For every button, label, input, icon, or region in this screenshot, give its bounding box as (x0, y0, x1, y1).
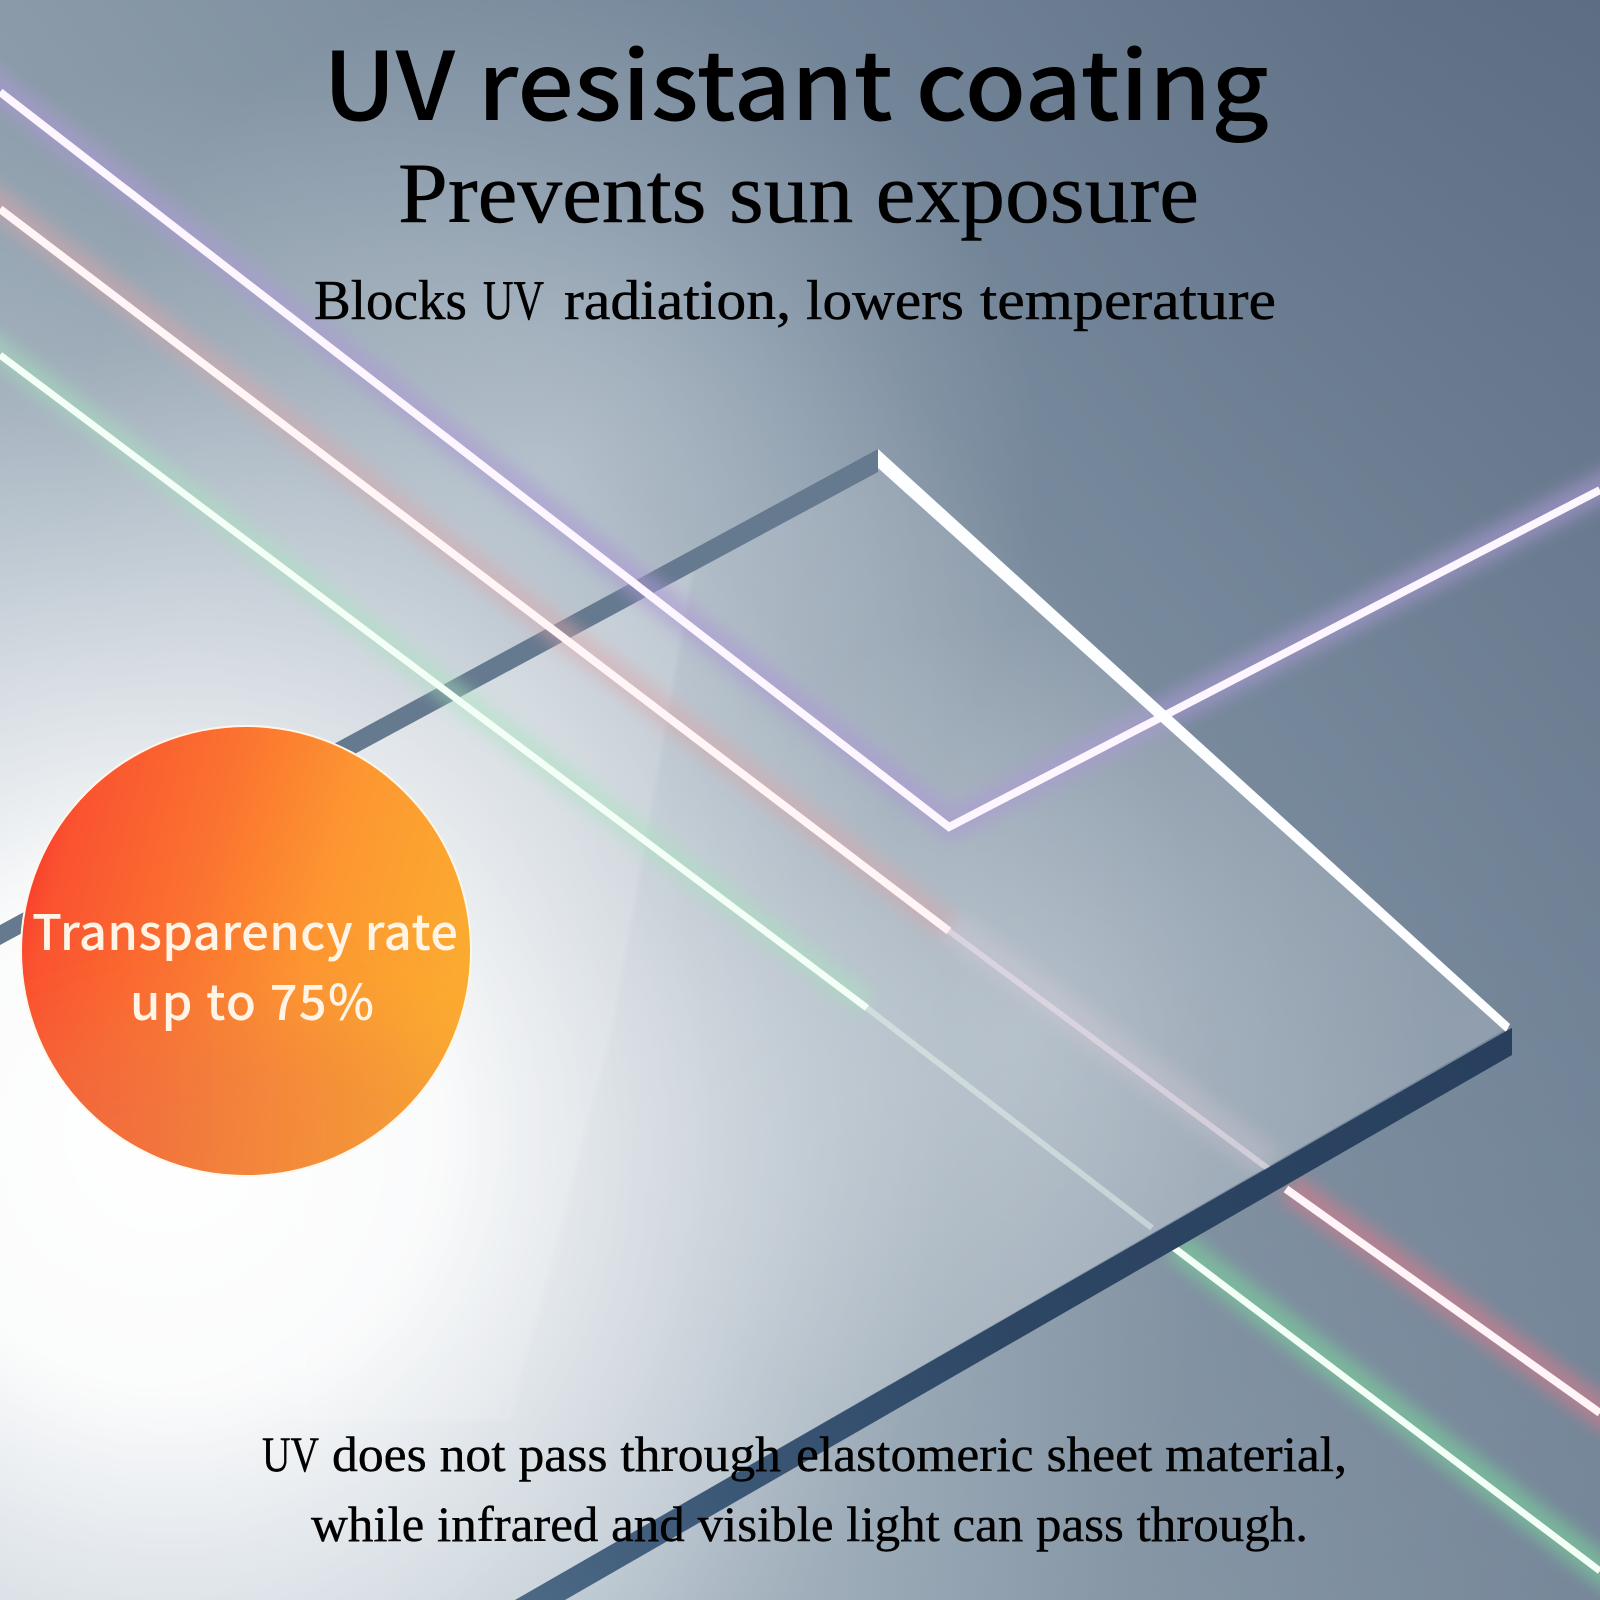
tagline: Blocks (314, 270, 467, 332)
bottom description: does not pass through (332, 1426, 781, 1482)
bottom description: UV (262, 1426, 319, 1482)
sheet front edge (515, 1028, 1512, 1600)
disc label: up to 75% (130, 964, 374, 1035)
bottom description: elastomeric sheet material, (796, 1426, 1347, 1482)
title: UV resistant coating (323, 12, 1269, 148)
transparent sheet body (0, 449, 1508, 1600)
tagline: UV (483, 270, 544, 332)
orange lens disc (20, 725, 472, 1177)
bottom description (262, 1426, 1347, 1552)
tagline: radiation, (564, 270, 791, 332)
disc label (32, 894, 458, 1035)
purple light beam (0, 43, 1600, 827)
tagline (314, 270, 1276, 332)
sheet back edge (0, 449, 878, 945)
disc label: Transparency rate (32, 894, 458, 965)
subtitle: Prevents sun exposure (398, 145, 1199, 241)
tagline: temperature (980, 270, 1276, 332)
bottom description: while infrared and visible light can pass through. (311, 1496, 1308, 1552)
tagline: lowers (806, 270, 964, 332)
sheet right edge highlight (878, 449, 1510, 1032)
